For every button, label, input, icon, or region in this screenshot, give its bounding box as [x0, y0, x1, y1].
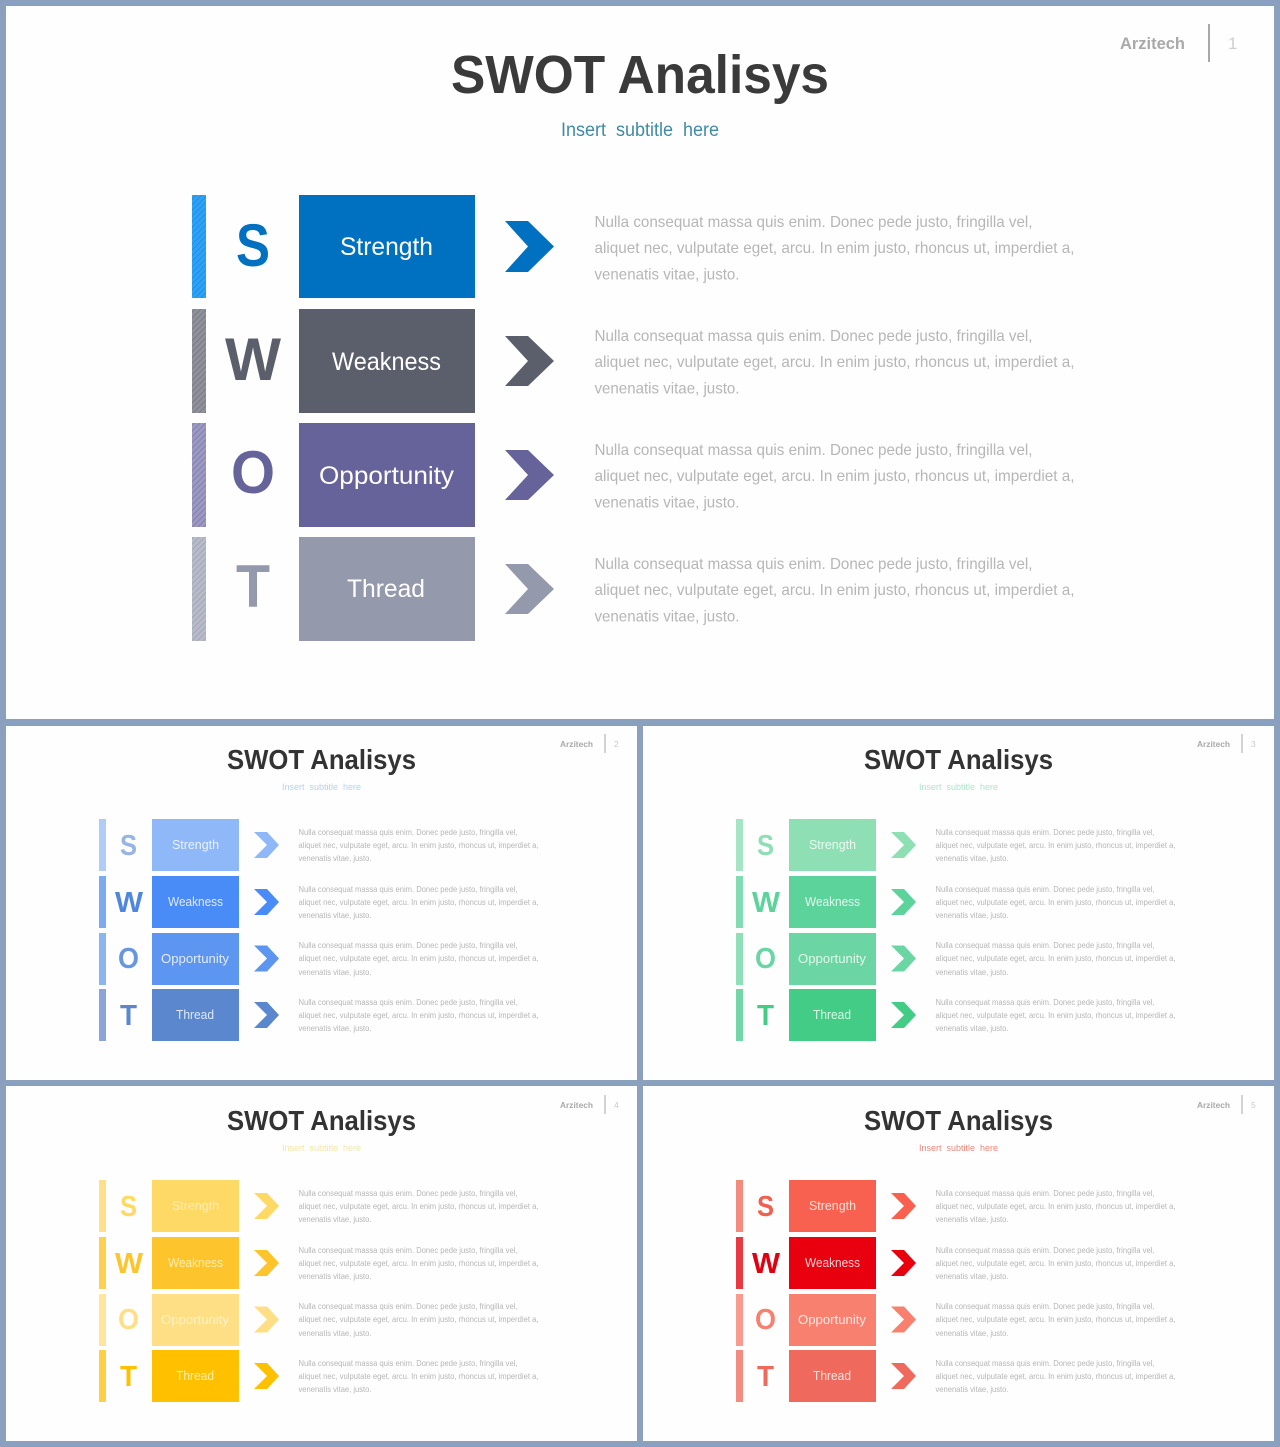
row: Strength: Nulla consequat massa quis enim. Donec pede justo, fringilla vel, [594, 214, 1032, 231]
row: Opportunity: Opportunity [319, 462, 455, 490]
header separator [1208, 24, 1210, 62]
row: Strength [99, 1180, 538, 1232]
page number: 5 [1251, 1100, 1256, 1110]
row: Opportunity: Opportunity [161, 1313, 230, 1327]
header separator [604, 734, 606, 753]
row: Thread: T [757, 1361, 774, 1393]
row: Weakness: Nulla consequat massa quis enim. Donec pede justo, fringilla vel, [936, 885, 1154, 894]
row: Thread: Nulla consequat massa quis enim. Donec pede justo, fringilla vel, [936, 998, 1154, 1007]
row: Thread: T [236, 553, 270, 620]
row: Strength [192, 195, 1074, 298]
subtitle: Insert subtitle here [919, 782, 998, 793]
brand name: Arzitech [560, 739, 593, 749]
row: Opportunity: Nulla consequat massa quis enim. Donec pede justo, fringilla vel, [936, 1302, 1154, 1311]
row: Opportunity: O [755, 1304, 776, 1336]
row: Thread: aliquet nec, vulputate eget, arcu. In enim justo, rhoncus ut, imperdiet a, [936, 1011, 1176, 1020]
row: Weakness: aliquet nec, vulputate eget, arcu. In enim justo, rhoncus ut, imperdiet a, [298, 1259, 538, 1268]
row: Opportunity [99, 933, 538, 985]
row: Strength [736, 1180, 1176, 1232]
title: SWOT Analisys [864, 1105, 1053, 1136]
subtitle: Insert subtitle here [561, 120, 719, 141]
row: Thread [99, 1350, 538, 1402]
page number: 3 [1251, 739, 1256, 749]
row: Opportunity: venenatis vitae, justo. [298, 968, 372, 977]
row: Opportunity: aliquet nec, vulputate eget, arcu. In enim justo, rhoncus ut, imperdiet a, [298, 1315, 538, 1324]
row: Opportunity: venenatis vitae, justo. [936, 968, 1008, 977]
row: Thread: aliquet nec, vulputate eget, arcu. In enim justo, rhoncus ut, imperdiet a, [594, 582, 1074, 599]
row: Weakness: Nulla consequat massa quis enim. Donec pede justo, fringilla vel, [298, 1246, 518, 1255]
title: SWOT Analisys [451, 45, 829, 105]
row: Weakness [192, 309, 1074, 413]
brand name: Arzitech [1120, 34, 1185, 53]
subtitle: Insert subtitle here [282, 782, 361, 793]
row: Weakness: venenatis vitae, justo. [298, 911, 372, 920]
row: Strength: S [120, 1191, 137, 1223]
subtitle: Insert subtitle here [919, 1143, 998, 1154]
row: Thread [192, 537, 1074, 641]
row: Thread: Nulla consequat massa quis enim. Donec pede justo, fringilla vel, [298, 998, 518, 1007]
row: Strength [99, 819, 538, 871]
row: Weakness [99, 876, 538, 928]
row: Weakness: Weakness [805, 895, 860, 909]
row: Opportunity [99, 1294, 538, 1346]
row: Strength: venenatis vitae, justo. [936, 854, 1008, 863]
row: Strength: aliquet nec, vulputate eget, arcu. In enim justo, rhoncus ut, imperdiet a, [936, 1202, 1176, 1211]
row: Strength: S [757, 1191, 774, 1223]
row: Thread: venenatis vitae, justo. [594, 608, 740, 626]
row: Strength: venenatis vitae, justo. [936, 1215, 1008, 1224]
row: Thread: Thread [347, 575, 425, 603]
row: Strength: Nulla consequat massa quis enim. Donec pede justo, fringilla vel, [936, 1189, 1154, 1198]
row: Opportunity: Nulla consequat massa quis enim. Donec pede justo, fringilla vel, [298, 941, 518, 950]
brand name: Arzitech [560, 1100, 593, 1110]
row: Opportunity: O [755, 943, 776, 975]
row: Strength: Strength [809, 1199, 856, 1213]
row: Strength: aliquet nec, vulputate eget, arcu. In enim justo, rhoncus ut, imperdiet a, [298, 1202, 538, 1211]
panel: blue slide 2 [6, 726, 637, 1080]
page number: 4 [614, 1100, 619, 1110]
header separator [604, 1095, 606, 1114]
row: Weakness: Weakness [168, 895, 223, 909]
row: Opportunity: Nulla consequat massa quis enim. Donec pede justo, fringilla vel, [594, 442, 1032, 459]
page number: 2 [614, 739, 619, 749]
row: Thread: T [757, 1000, 774, 1032]
row: Strength: S [236, 212, 270, 279]
row: Opportunity: venenatis vitae, justo. [594, 494, 740, 512]
row: Weakness [736, 876, 1176, 928]
page number: 1 [1228, 34, 1237, 53]
row: Thread: Nulla consequat massa quis enim. Donec pede justo, fringilla vel, [936, 1359, 1154, 1368]
row: Strength: Nulla consequat massa quis enim. Donec pede justo, fringilla vel, [298, 828, 518, 837]
row: Strength: aliquet nec, vulputate eget, arcu. In enim justo, rhoncus ut, imperdiet a, [594, 240, 1074, 257]
header separator [1242, 734, 1243, 753]
row: Strength: aliquet nec, vulputate eget, arcu. In enim justo, rhoncus ut, imperdiet a, [298, 841, 538, 850]
row: Thread [736, 989, 1176, 1041]
row: Thread: Thread [813, 1008, 851, 1022]
row: Weakness: Weakness [168, 1256, 223, 1270]
row: Weakness: aliquet nec, vulputate eget, arcu. In enim justo, rhoncus ut, imperdiet a, [594, 354, 1074, 371]
row: Weakness: W [115, 887, 144, 919]
row: Opportunity: Opportunity [798, 1313, 867, 1327]
title: SWOT Analisys [227, 1105, 416, 1136]
row: Strength: Strength [340, 233, 433, 261]
row: Thread: venenatis vitae, justo. [936, 1024, 1008, 1033]
row: Opportunity: aliquet nec, vulputate eget, arcu. In enim justo, rhoncus ut, imperdiet a, [936, 954, 1176, 963]
row: Thread: aliquet nec, vulputate eget, arcu. In enim justo, rhoncus ut, imperdiet a, [936, 1372, 1176, 1381]
row: Thread: Nulla consequat massa quis enim. Donec pede justo, fringilla vel, [594, 556, 1032, 573]
panel: red slide 5 [643, 1086, 1274, 1441]
row: Weakness [99, 1237, 538, 1289]
row: Strength: venenatis vitae, justo. [594, 266, 740, 284]
row: Strength: Strength [809, 838, 856, 852]
row: Opportunity [192, 423, 1074, 527]
row: Thread [736, 1350, 1176, 1402]
row: Opportunity: Nulla consequat massa quis enim. Donec pede justo, fringilla vel, [298, 1302, 518, 1311]
row: Thread: venenatis vitae, justo. [936, 1385, 1008, 1394]
row: Opportunity: Nulla consequat massa quis enim. Donec pede justo, fringilla vel, [936, 941, 1154, 950]
row: Strength: Nulla consequat massa quis enim. Donec pede justo, fringilla vel, [298, 1189, 518, 1198]
row: Weakness: venenatis vitae, justo. [936, 911, 1008, 920]
row: Thread: aliquet nec, vulputate eget, arcu. In enim justo, rhoncus ut, imperdiet a, [298, 1372, 538, 1381]
row: Weakness: aliquet nec, vulputate eget, arcu. In enim justo, rhoncus ut, imperdiet a, [936, 1259, 1176, 1268]
row: Opportunity: venenatis vitae, justo. [298, 1329, 372, 1338]
row: Thread: Thread [813, 1369, 851, 1383]
brand name: Arzitech [1197, 739, 1230, 749]
row: Strength: venenatis vitae, justo. [298, 854, 372, 863]
row: Opportunity [736, 1294, 1176, 1346]
brand name: Arzitech [1197, 1100, 1230, 1110]
row: Strength: venenatis vitae, justo. [298, 1215, 372, 1224]
row: Opportunity: venenatis vitae, justo. [936, 1329, 1008, 1338]
panel: green slide 3 [643, 726, 1274, 1080]
row: Strength: Strength [172, 838, 219, 852]
row: Thread: venenatis vitae, justo. [298, 1385, 372, 1394]
panel: main slide 1 [6, 6, 1274, 719]
row: Thread: aliquet nec, vulputate eget, arcu. In enim justo, rhoncus ut, imperdiet a, [298, 1011, 538, 1020]
row: Weakness: W [752, 887, 781, 919]
row: Opportunity: Opportunity [161, 952, 230, 966]
row: Opportunity: Opportunity [798, 952, 867, 966]
row: Thread: Nulla consequat massa quis enim. Donec pede justo, fringilla vel, [298, 1359, 518, 1368]
row: Weakness: venenatis vitae, justo. [594, 380, 740, 398]
row: Weakness: Nulla consequat massa quis enim. Donec pede justo, fringilla vel, [936, 1246, 1154, 1255]
row: Weakness: W [115, 1248, 144, 1280]
row: Weakness [736, 1237, 1176, 1289]
row: Weakness: W [225, 326, 281, 393]
title: SWOT Analisys [864, 744, 1053, 775]
row: Thread [99, 989, 538, 1041]
row: Strength: Nulla consequat massa quis enim. Donec pede justo, fringilla vel, [936, 828, 1154, 837]
row: Opportunity: O [118, 943, 139, 975]
subtitle: Insert subtitle here [282, 1143, 361, 1154]
row: Opportunity: O [118, 1304, 139, 1336]
row: Thread: T [120, 1000, 137, 1032]
row: Weakness: Nulla consequat massa quis enim. Donec pede justo, fringilla vel, [298, 885, 518, 894]
row: Weakness: Nulla consequat massa quis enim. Donec pede justo, fringilla vel, [594, 328, 1032, 345]
row: Opportunity: aliquet nec, vulputate eget, arcu. In enim justo, rhoncus ut, imperdiet a, [936, 1315, 1176, 1324]
row: Weakness: Weakness [332, 348, 441, 376]
row: Thread: Thread [176, 1369, 214, 1383]
title: SWOT Analisys [227, 744, 416, 775]
row: Weakness: aliquet nec, vulputate eget, arcu. In enim justo, rhoncus ut, imperdiet a, [936, 898, 1176, 907]
row: Opportunity: aliquet nec, vulputate eget, arcu. In enim justo, rhoncus ut, imperdiet a, [594, 468, 1074, 485]
row: Weakness: venenatis vitae, justo. [298, 1272, 372, 1281]
row: Thread: venenatis vitae, justo. [298, 1024, 372, 1033]
row: Opportunity [736, 933, 1176, 985]
row: Weakness: aliquet nec, vulputate eget, arcu. In enim justo, rhoncus ut, imperdiet a, [298, 898, 538, 907]
row: Strength [736, 819, 1176, 871]
row: Opportunity: aliquet nec, vulputate eget, arcu. In enim justo, rhoncus ut, imperdiet a, [298, 954, 538, 963]
panel: yellow slide 4 [6, 1086, 637, 1441]
row: Strength: aliquet nec, vulputate eget, arcu. In enim justo, rhoncus ut, imperdiet a, [936, 841, 1176, 850]
row: Thread: Thread [176, 1008, 214, 1022]
row: Strength: S [757, 830, 774, 862]
row: Strength: S [120, 830, 137, 862]
row: Thread: T [120, 1361, 137, 1393]
row: Strength: Strength [172, 1199, 219, 1213]
row: Weakness: Weakness [805, 1256, 860, 1270]
row: Weakness: W [752, 1248, 781, 1280]
row: Weakness: venenatis vitae, justo. [936, 1272, 1008, 1281]
header separator [1242, 1095, 1243, 1114]
row: Opportunity: O [231, 439, 275, 506]
